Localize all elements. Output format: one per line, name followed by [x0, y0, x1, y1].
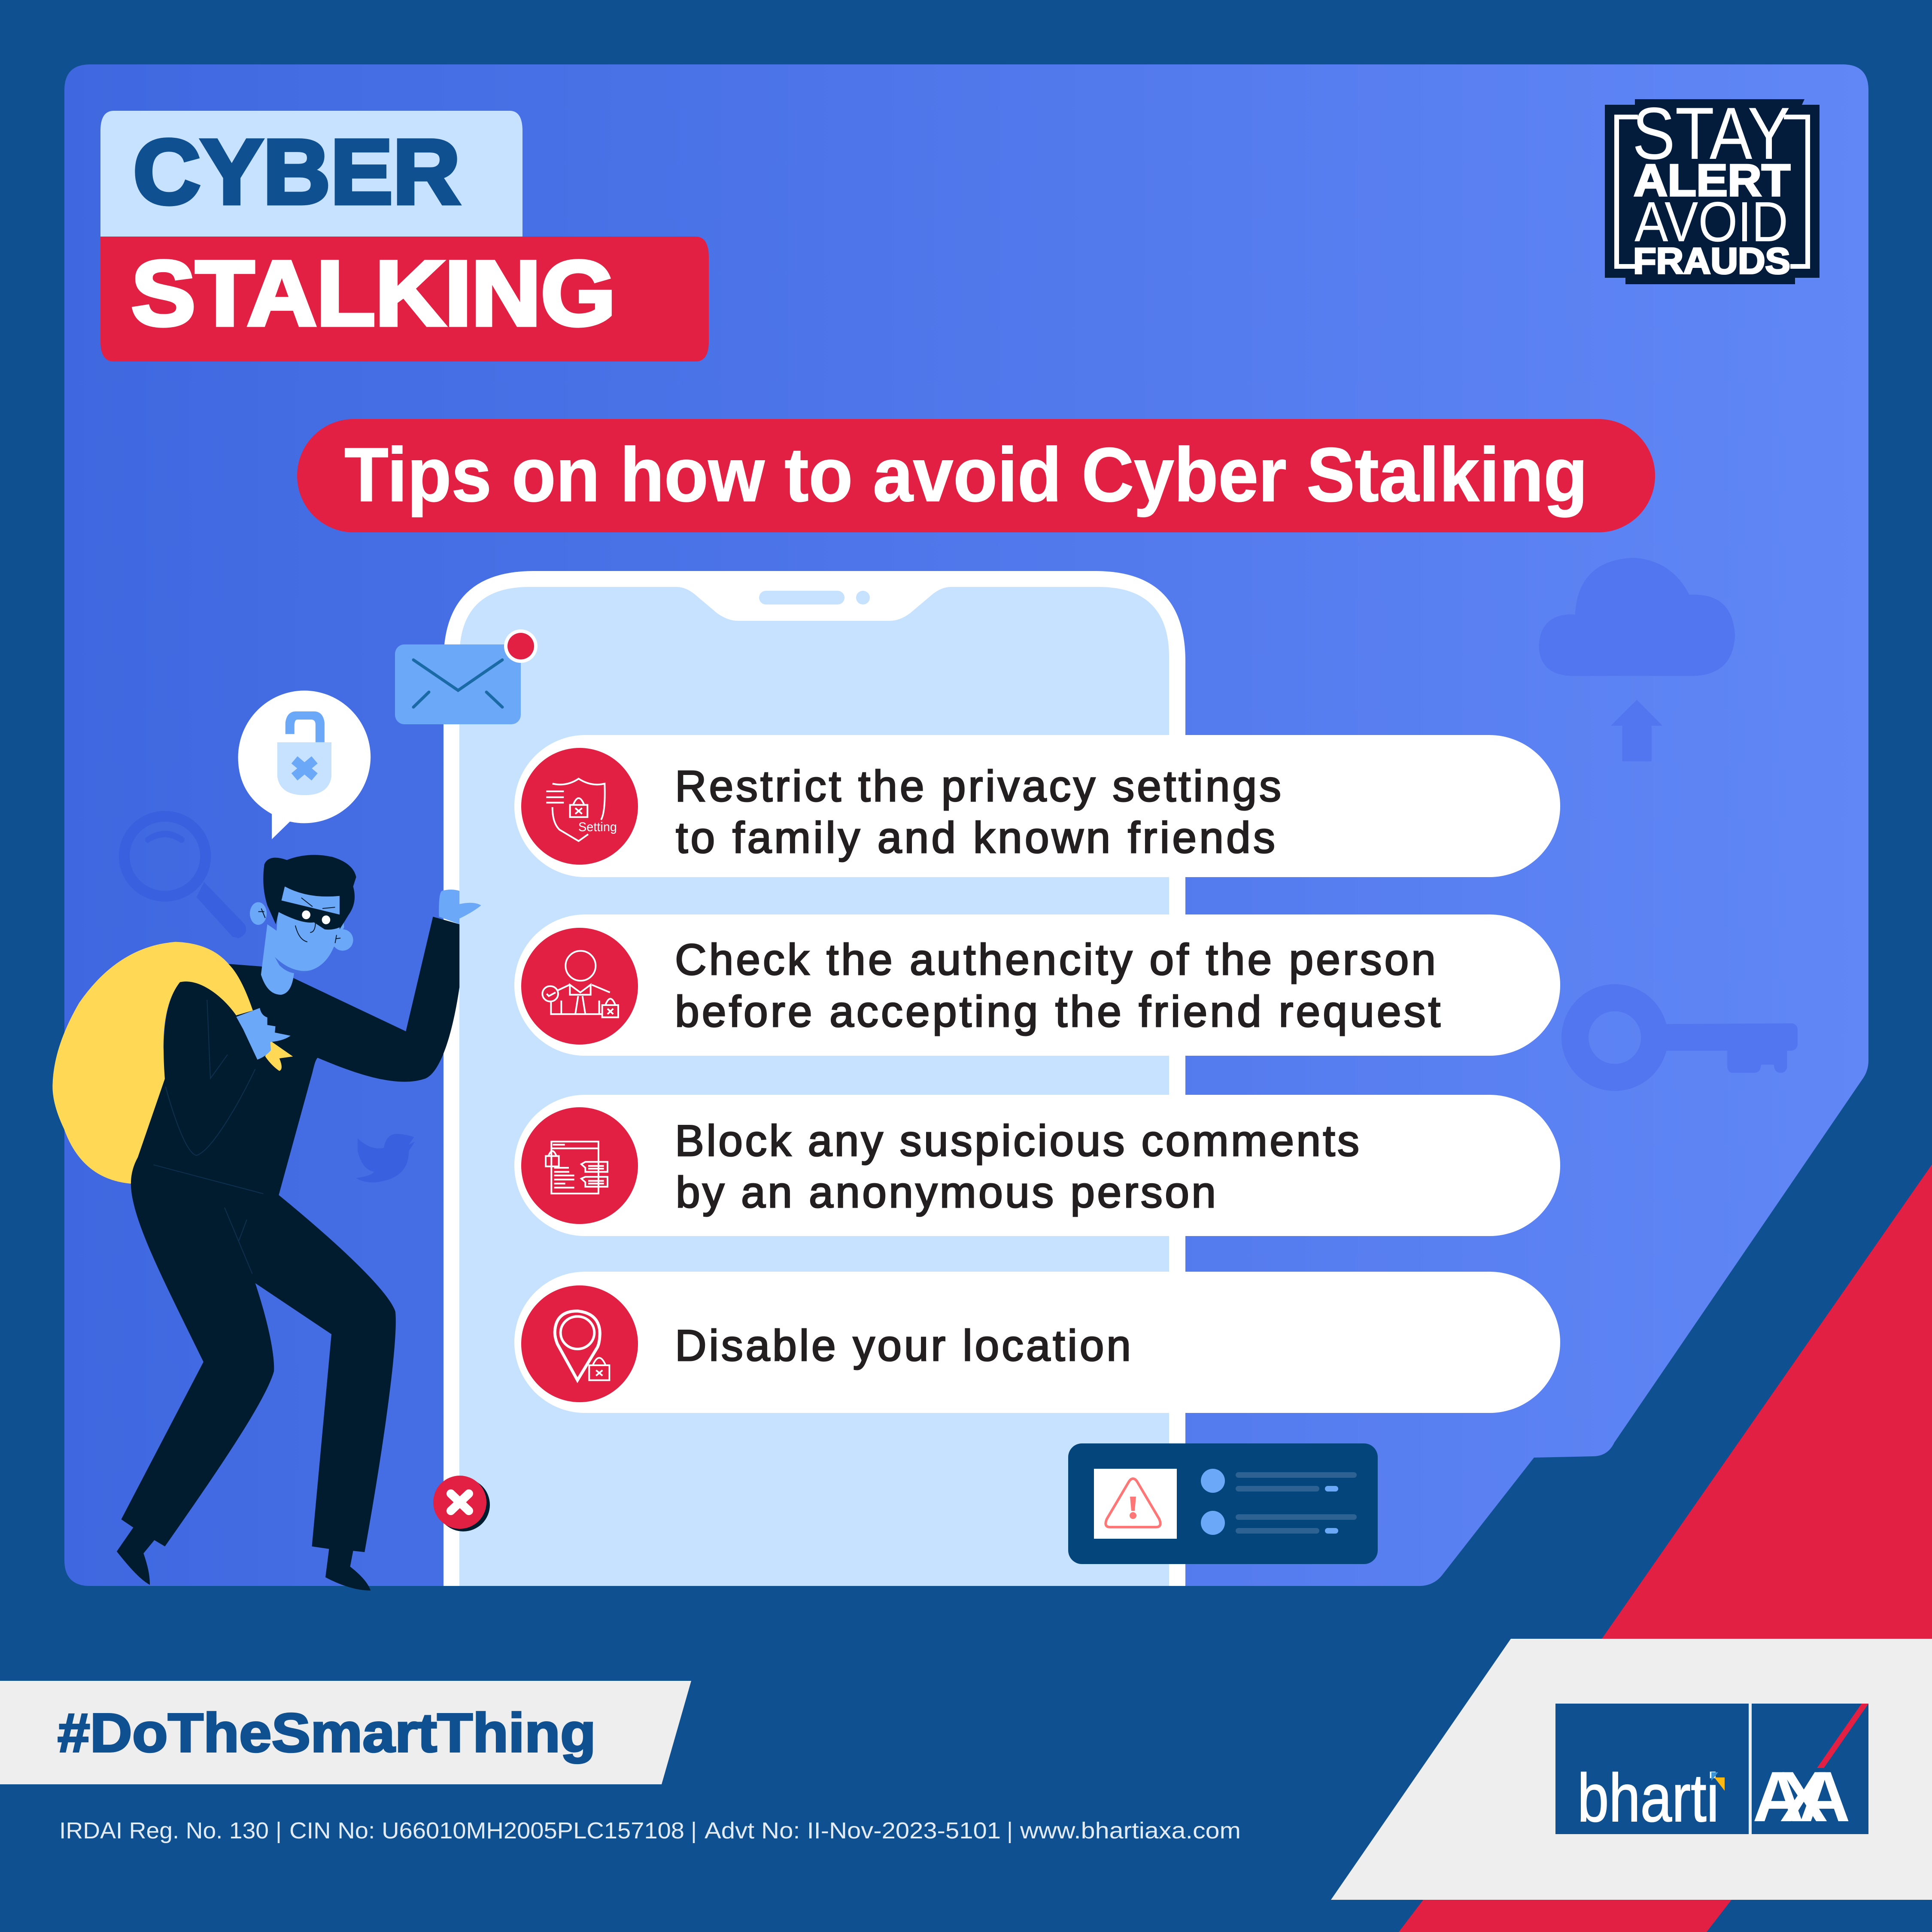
tip 1 text: Restrict the privacy settings: [675, 762, 1281, 811]
warning triangle: [1106, 1479, 1160, 1527]
badge: stay alert avoid frauds: [1605, 92, 1820, 284]
tip 2: [514, 914, 1560, 1056]
tip 4 icon circle: [521, 1285, 638, 1402]
footer legal text: www.bhartiaxa.com: [1020, 1818, 1241, 1844]
axa logo box: [1752, 1704, 1868, 1834]
tip 2 icon circle: [521, 928, 638, 1045]
tip 3: [514, 1095, 1560, 1236]
footer legal text: |: [276, 1818, 282, 1844]
tip 3 icon circle: [521, 1107, 638, 1224]
left hand: [236, 1008, 291, 1060]
background icon: magnifier: [119, 811, 246, 938]
tip 1 icon: privacy shield: [546, 779, 605, 841]
tip 4: [514, 1272, 1560, 1413]
heading background: [297, 419, 1655, 532]
red diagonal band: [1602, 1164, 1932, 1639]
badge text: FRAUDS: [1633, 241, 1790, 282]
lock body: [277, 742, 331, 795]
tip 2 text: before accepting the friend request: [675, 987, 1440, 1036]
bharti accent: [1711, 1772, 1725, 1791]
card row 1: [1201, 1469, 1357, 1493]
bharti wordmark: bharti: [1577, 1760, 1719, 1836]
grey logo panel: [1331, 1639, 1932, 1900]
footer legal text: Advt No: II-Nov-2023-5101: [705, 1818, 1001, 1844]
axa red slash: [1817, 1704, 1868, 1768]
footer legal text: [59, 1818, 1241, 1844]
footer legal text: |: [691, 1818, 697, 1844]
footer legal text: IRDAI Reg. No. 130: [59, 1818, 269, 1844]
face: [275, 887, 344, 971]
tip 1 icon circle: [521, 748, 638, 865]
title box: cyber: [100, 111, 522, 237]
tip 2 pill: [514, 914, 1560, 1056]
title: CYBER STALKING: [100, 111, 709, 361]
card row 2: [1201, 1511, 1357, 1535]
badge text: ALERT: [1634, 155, 1790, 206]
background icon: twitter bird: [356, 1134, 415, 1182]
tip 3 text: [675, 1116, 1359, 1217]
red close button: [433, 1476, 490, 1531]
clothing lines: [153, 1000, 263, 1274]
warning tile: [1094, 1469, 1177, 1539]
bag tie: [265, 1041, 293, 1071]
heading text: Tips on how to avoid Cyber Stalking: [344, 432, 1588, 517]
heading pill: [297, 419, 1655, 532]
left ear: [250, 902, 267, 925]
lock shackle: [286, 711, 325, 742]
loot bag: [52, 942, 253, 1184]
tip 1 text: to family and known friends: [676, 813, 1275, 862]
main blue panel: [64, 64, 1868, 1586]
hashtag text: #DoTheSmartThing: [58, 1702, 596, 1764]
title word: stalking: STALKING: [131, 242, 616, 345]
axa wordmark: AXA: [1753, 1757, 1850, 1837]
tip 1 text: [675, 762, 1281, 862]
title word: cyber: CYBER: [133, 121, 460, 223]
title box: stalking: [100, 237, 709, 361]
hashtag band: [0, 1681, 691, 1784]
badge background: [1605, 99, 1820, 284]
footer legal text: |: [1007, 1818, 1013, 1844]
tip 1: [514, 735, 1560, 877]
tip 3 text: Block any suspicious comments: [675, 1116, 1359, 1165]
tip 1 icon label: Setting: [578, 820, 617, 834]
phone bezel: [444, 571, 1185, 1631]
badge frame: [1617, 117, 1807, 266]
tip 1 pill: [514, 735, 1560, 877]
tip 4 icon: location pin: [555, 1311, 609, 1380]
tip 4 pill: [514, 1272, 1560, 1413]
mask: [278, 900, 340, 930]
thief arm over bag: [164, 981, 272, 1097]
tip 4 text: Disable your location: [675, 1321, 1131, 1370]
background icon: key: [1561, 984, 1798, 1091]
envelope icon: [395, 629, 538, 724]
tip 3 icon: blocked comments: [546, 1142, 608, 1194]
bharti logo box: [1555, 1704, 1749, 1834]
phone speaker: [759, 591, 844, 605]
chin shadow: [275, 957, 314, 974]
speech bubble with open lock: [238, 691, 371, 839]
logo: bharti axa: [1555, 1704, 1868, 1837]
phone: [444, 571, 1185, 1631]
notification dot: [504, 629, 538, 663]
hair: [263, 855, 356, 929]
badge text: STAY: [1632, 92, 1790, 175]
band shape: [0, 1681, 691, 1784]
phone screen: [459, 587, 1169, 1631]
right hand: [439, 890, 481, 924]
card background: [1068, 1443, 1378, 1564]
face lines: [258, 898, 340, 943]
footer legal text: CIN No: U66010MH2005PLC157108: [289, 1818, 684, 1844]
neck: [261, 924, 299, 995]
tip 2 text: Check the authencity of the person: [675, 935, 1436, 984]
thief character: [52, 855, 481, 1591]
thief body: [117, 917, 459, 1591]
eyes: [302, 910, 330, 924]
tip 2 text: [675, 935, 1440, 1036]
badge text: [1632, 92, 1790, 282]
phone camera: [856, 591, 870, 605]
tip 2 icon: person verification: [542, 951, 618, 1017]
lock x mark: [295, 760, 315, 777]
badge text: AVOID: [1634, 190, 1788, 253]
alert notification card: [1068, 1443, 1378, 1564]
background icon: cloud and upload arrow: [1539, 558, 1735, 761]
bubble: [238, 691, 371, 839]
tip 3 pill: [514, 1095, 1560, 1236]
right ear: [332, 929, 353, 951]
tip 3 text: by an anonymous person: [676, 1168, 1216, 1217]
red lower band: [1399, 1900, 1732, 1932]
